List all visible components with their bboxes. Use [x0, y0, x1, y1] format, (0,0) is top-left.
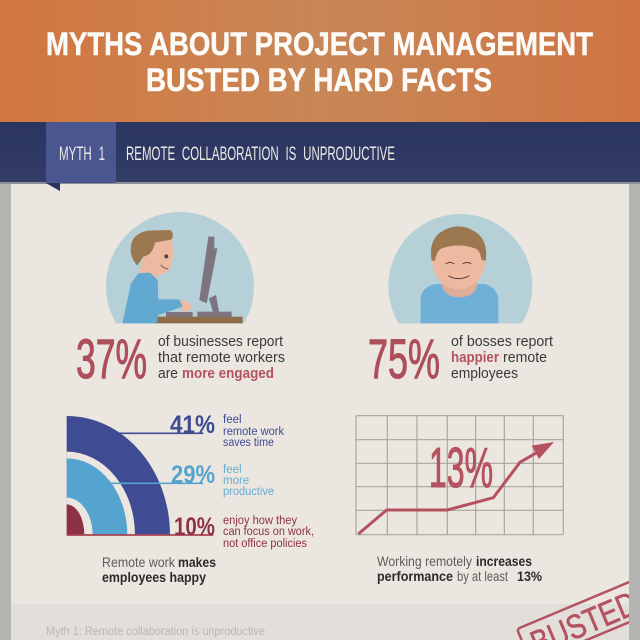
label: 41 percent: remote work	[223, 426, 284, 438]
grid	[356, 416, 563, 535]
mouth	[161, 265, 168, 269]
face	[432, 231, 485, 289]
desk items	[166, 312, 193, 317]
stat: 37 percent: that remote workers	[158, 350, 285, 366]
arrow head	[532, 442, 554, 459]
icon: worker at computer	[106, 212, 254, 323]
label: 10 percent: enjoy how they	[223, 515, 297, 527]
label: 10 percent	[174, 513, 314, 550]
caption: performance: performance	[377, 568, 453, 584]
caption: remote work: Remote work	[102, 554, 176, 570]
torso and arm	[122, 273, 183, 323]
title: BUSTED BY HARD FACTS	[146, 62, 492, 98]
trend line	[358, 451, 540, 534]
stat: 75 percent: happier	[451, 350, 499, 366]
caption: performance: Working remotely	[377, 553, 472, 569]
caption: remote work	[102, 554, 216, 585]
monitor stand	[209, 295, 219, 313]
label: 41 percent: saves time	[223, 437, 274, 449]
caption: performance: 13%	[517, 568, 542, 584]
myth banner	[0, 122, 640, 191]
arc: 10 percent	[67, 504, 84, 535]
desk	[152, 317, 243, 323]
neck and face	[138, 236, 173, 278]
myth number: MYTH 1	[59, 144, 105, 165]
chart: performance line	[356, 416, 563, 535]
label: 10 percent: 10%	[174, 513, 215, 541]
stat: 37 percent: 37%	[76, 327, 147, 390]
stat: 37 percent	[76, 327, 285, 390]
stat: 37 percent: are	[158, 366, 178, 382]
leader lines	[115, 431, 203, 436]
stat: 37 percent: more engaged	[182, 366, 274, 382]
caption: performance: increases	[476, 553, 532, 569]
icon: happy employee	[388, 214, 532, 323]
label: 29 percent: feel	[223, 464, 242, 476]
hair	[431, 226, 486, 261]
eyes	[446, 262, 471, 264]
chart: remote work happiness arcs	[67, 416, 213, 535]
label: 29 percent	[171, 461, 274, 498]
caption: remote work: employees happy	[102, 569, 206, 585]
mouth	[448, 276, 469, 279]
stat: 75 percent: remote	[503, 350, 547, 366]
shirt	[421, 284, 498, 323]
stat: 75 percent: of bosses report	[451, 334, 553, 350]
label: 41 percent: 41%	[170, 411, 215, 439]
hand	[181, 299, 191, 311]
myth tab	[46, 122, 116, 191]
footer myth text: Myth 1: Remote collaboration is unproductive	[46, 626, 265, 638]
stat: 75 percent: 75%	[368, 327, 440, 390]
title	[46, 26, 593, 98]
label: 10 percent: not office policies	[223, 538, 307, 550]
header band	[0, 0, 640, 122]
caption: performance	[377, 553, 542, 584]
panel: myth 1 content	[11, 183, 629, 604]
arc: 41 percent	[67, 416, 170, 535]
caption: remote work: makes	[178, 554, 216, 570]
label: 41 percent	[170, 411, 284, 449]
caption: performance: by at least	[457, 568, 508, 584]
label: 29 percent: 29%	[171, 461, 215, 489]
arc: 29 percent	[67, 458, 127, 535]
panel: footer strip	[11, 604, 629, 640]
stat: 37 percent: of businesses report	[158, 334, 283, 350]
myth heading: REMOTE COLLABORATION IS UNPRODUCTIVE	[126, 144, 395, 165]
myth tab fold	[46, 183, 60, 191]
stat: 75 percent: employees	[451, 366, 518, 382]
eye	[164, 254, 168, 258]
chart value: 13%	[429, 436, 493, 500]
monitor	[199, 237, 217, 303]
page background margins	[0, 183, 640, 640]
label: 29 percent: productive	[223, 486, 274, 498]
label: 29 percent: more	[223, 475, 249, 487]
neck	[442, 275, 477, 297]
stat: 75 percent	[368, 327, 553, 390]
hair	[131, 230, 173, 266]
label: 10 percent: can focus on work,	[223, 526, 314, 538]
label: 41 percent: feel	[223, 414, 242, 426]
